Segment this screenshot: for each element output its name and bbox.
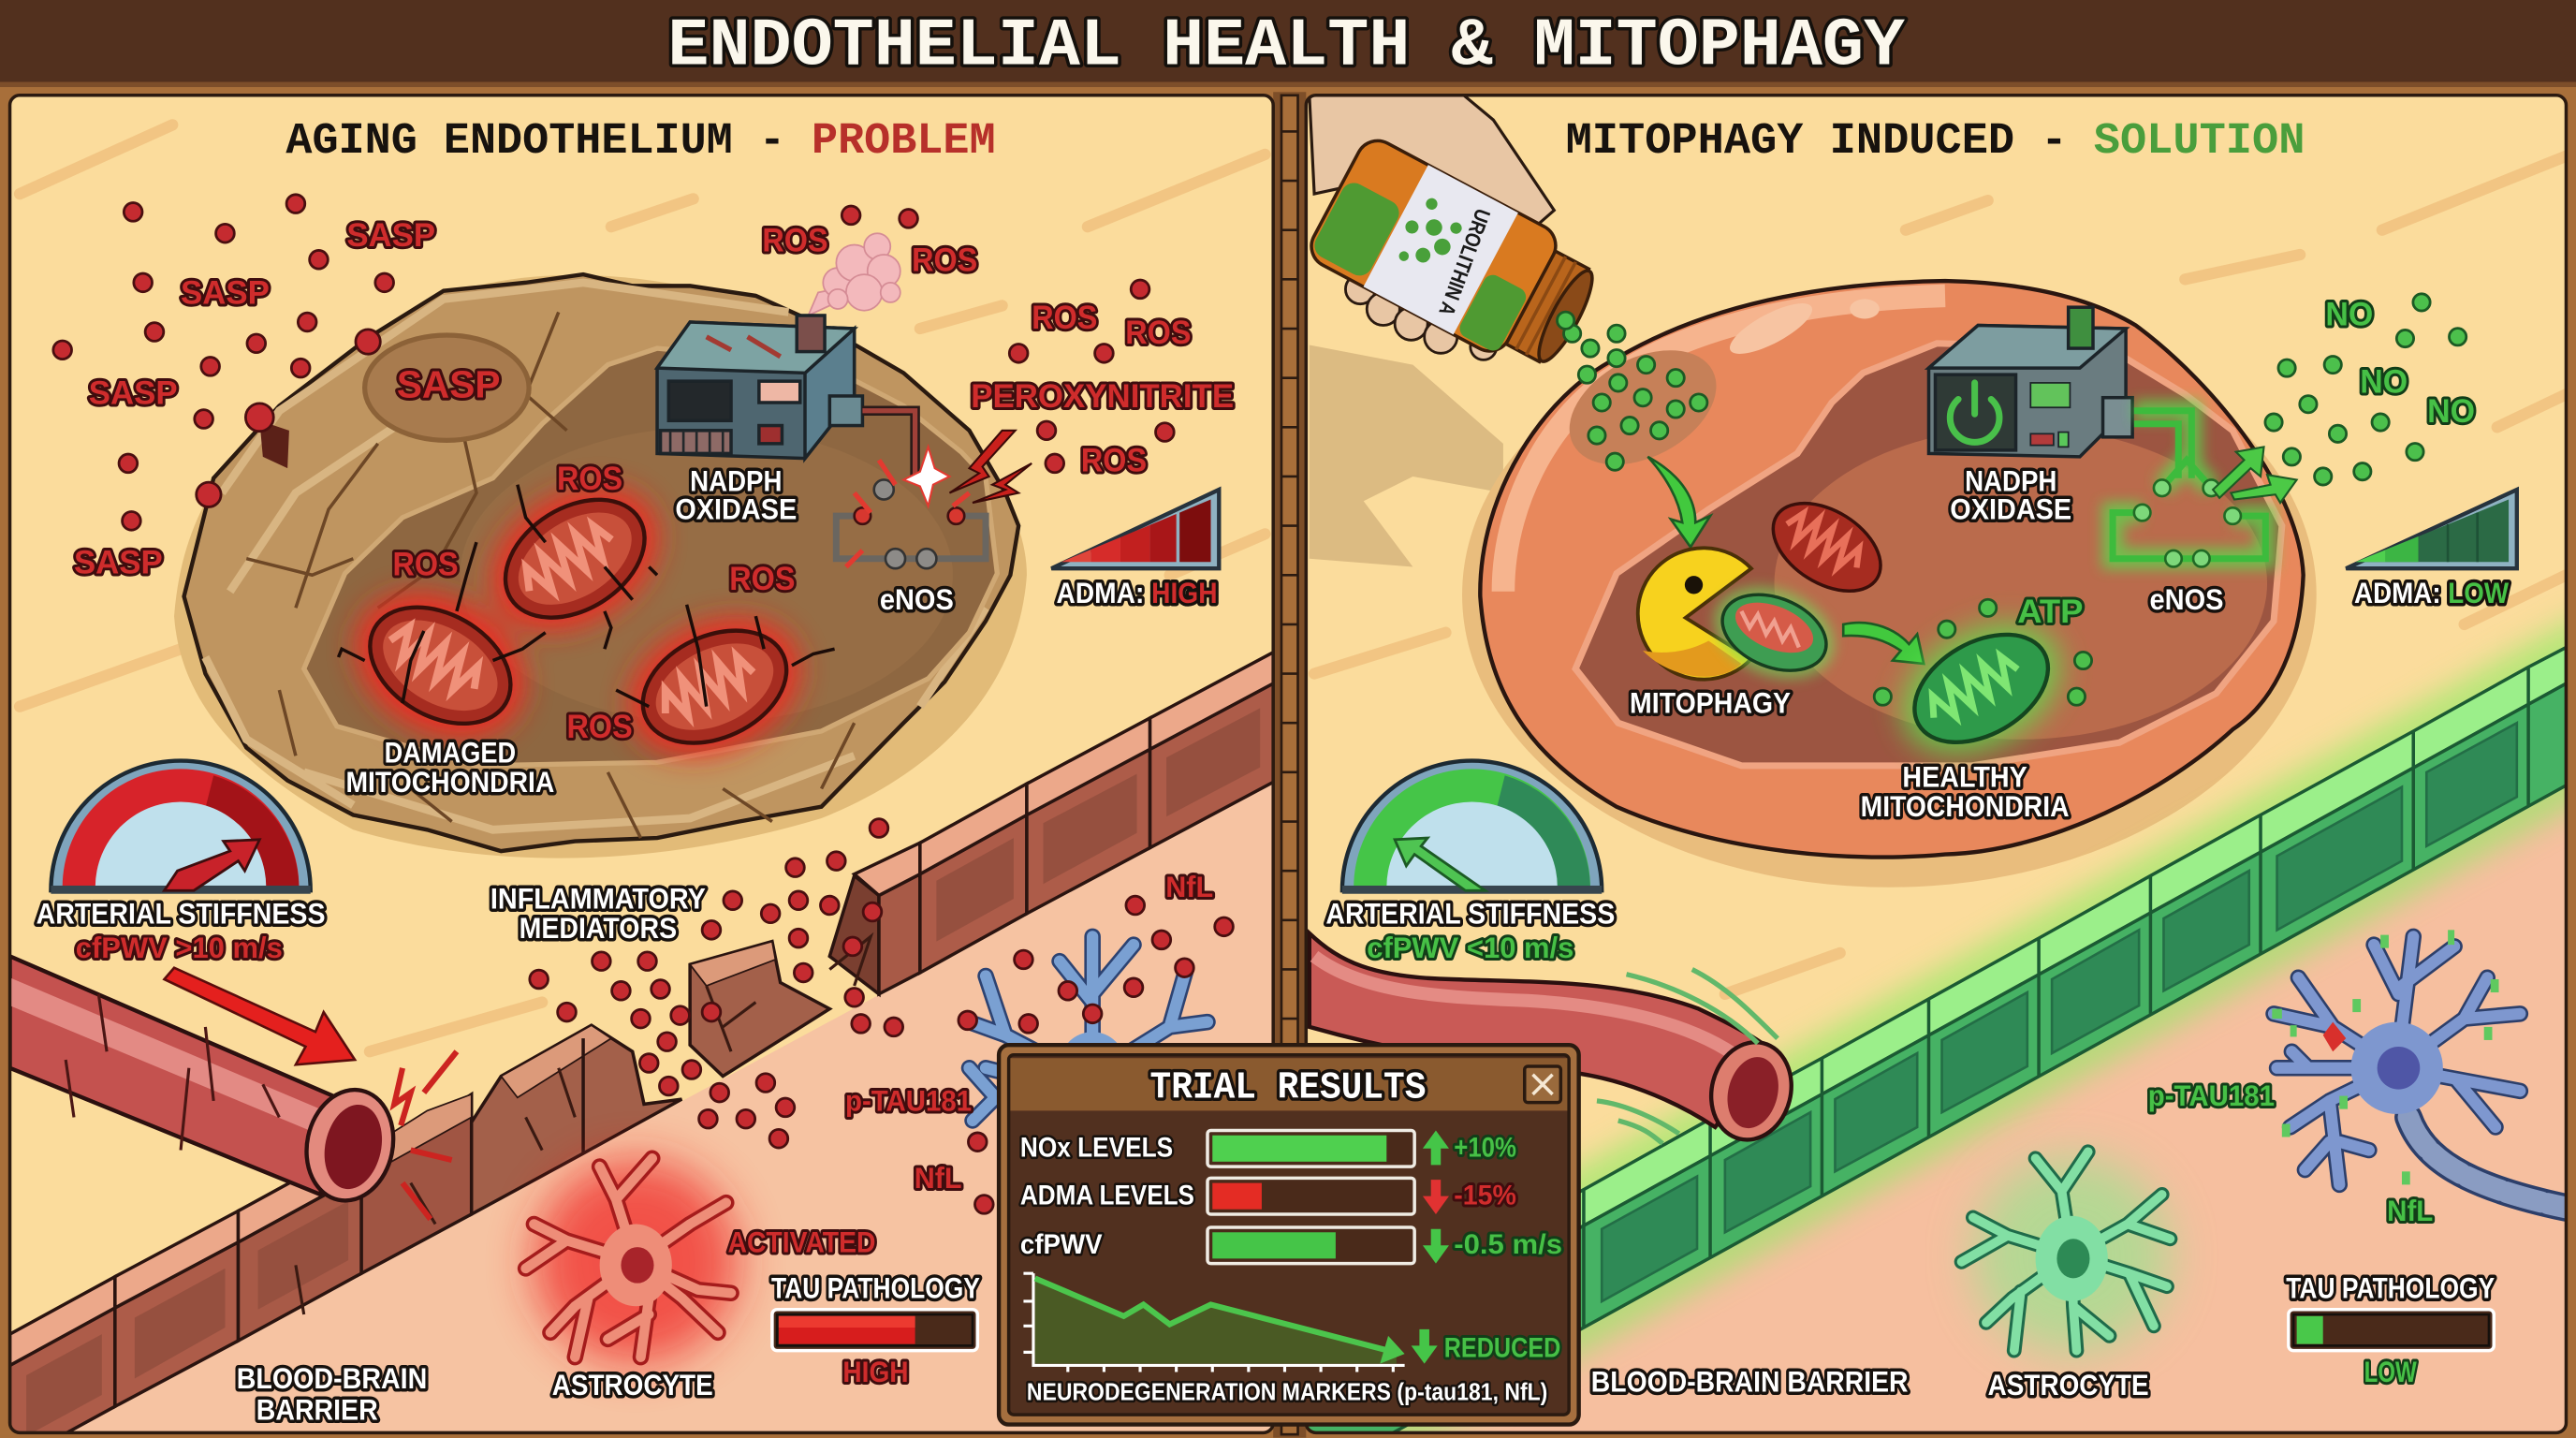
bar fill (1212, 1183, 1262, 1210)
damaged mitochondrion 3 (616, 604, 835, 745)
vessel opening (297, 1081, 403, 1209)
icon: NADPH oxidase off machine (1928, 307, 2132, 457)
bar (1208, 1227, 1414, 1264)
label eNOS: eNOS (2150, 582, 2224, 616)
arrows to NO (2213, 447, 2297, 503)
bottle (1304, 133, 1609, 383)
reduced indicator (1412, 1329, 1560, 1364)
cell body (1480, 281, 2304, 858)
label tau pathology: TAU PATHOLOGY (2286, 1270, 2495, 1304)
brain tissue area (1298, 785, 2566, 1438)
label arterial stiffness: ARTERIAL STIFFNESS (37, 896, 326, 930)
gauge needle (1395, 838, 1486, 890)
damaged endothelial cell (184, 274, 1018, 851)
icon: hand and urolithin bottle (1304, 95, 1609, 383)
label SASP 2: SASP (181, 275, 270, 312)
label p-tau181: p-TAU181 (2148, 1078, 2275, 1112)
chart line (1035, 1278, 1388, 1351)
title bar (0, 0, 2576, 87)
label tau high: HIGH (842, 1355, 909, 1388)
panel title: TRIAL RESULTS (1150, 1066, 1426, 1109)
label oxidase: OXIDASE (1950, 492, 2071, 526)
icon: arterial stiffness gauge high (51, 761, 311, 894)
label ATP: ATP (2017, 594, 2083, 630)
neuron green specks (2272, 930, 2499, 1184)
red mitochondrion awaiting removal (1758, 485, 1896, 609)
eNOS active circuit (2113, 411, 2265, 566)
label NO 3: NO (2427, 393, 2475, 430)
icon: eNOS broken circuit (836, 479, 986, 568)
bottle label text: UROLITHIN A (1434, 206, 1496, 319)
title: ENDOTHELIAL HEALTH & MITOPHAGY (667, 7, 1906, 84)
label mitochondria: MITOCHONDRIA (1861, 789, 2070, 823)
label tau low: LOW (2364, 1355, 2417, 1388)
icon: arterial stiffness gauge low (1342, 761, 1602, 894)
row: ADMA levels (1020, 1178, 1516, 1214)
hand (1310, 95, 1554, 233)
background streaks (1314, 156, 2566, 994)
floor inner tone (460, 427, 953, 723)
eNOS circuit glow (2113, 411, 2265, 559)
heading: mitophagy induced solution: MITOPHAGY INDUCED - SOLUTION (1566, 117, 2305, 167)
label ROS 8: ROS (729, 561, 795, 597)
line chart: neurodegeneration markers (1023, 1273, 1405, 1372)
row label: ADMA LEVELS (1020, 1180, 1194, 1211)
panel background sand (1306, 95, 2566, 1432)
label activated: ACTIVATED (728, 1225, 875, 1258)
label ROS 5: ROS (1081, 443, 1147, 479)
label oxidase: OXIDASE (675, 492, 797, 526)
label tau pathology: TAU PATHOLOGY (771, 1270, 980, 1304)
brain tissue area (67, 782, 1273, 1432)
rock outer shell (184, 274, 1018, 851)
green arrow to pacman (1647, 457, 1710, 547)
eaten mitochondrion (1701, 569, 1848, 696)
label NADPH: NADPH (690, 464, 782, 498)
vessel opening (1701, 1034, 1802, 1149)
wall brick inset panels left (26, 1201, 348, 1436)
label NfL: NfL (2387, 1194, 2433, 1227)
label arterial stiffness: ARTERIAL STIFFNESS (1325, 896, 1615, 930)
down arrow (1412, 1329, 1438, 1364)
tau pathology low bar (2289, 1310, 2494, 1351)
icon: ADMA high meter (1051, 490, 1219, 568)
row label: NOx LEVELS (1020, 1133, 1173, 1164)
icon: pacman mitophagy (1638, 548, 1751, 680)
floor lighter centre (1775, 427, 2267, 740)
panel header (1010, 1058, 1567, 1110)
panel frame (999, 1045, 1579, 1425)
icon: sparks and lightning (846, 431, 1032, 566)
icon: NADPH oxidase machine (657, 315, 862, 459)
wall bricks right (829, 653, 1273, 994)
wall top surface (1298, 647, 2566, 1384)
background streaks (14, 119, 1271, 1058)
label mitophagy: MITOPHAGY (1630, 686, 1791, 720)
close button (1525, 1066, 1560, 1103)
heading: aging endothelium problem: AGING ENDOTHELIUM - PROBLEM (285, 117, 996, 167)
rock highlights (205, 283, 986, 829)
label mitochondria: MITOCHONDRIA (345, 765, 554, 799)
crumbled wall piece A (472, 1025, 681, 1214)
crumbled wall piece B (690, 942, 829, 1077)
green urolithin particles (1557, 312, 1707, 470)
label NfL 2: NfL (915, 1161, 962, 1195)
label ROS 9: ROS (567, 709, 633, 745)
wall brick panels (1602, 723, 2517, 1301)
label ROS 4: ROS (1125, 315, 1191, 351)
red particles SASP (53, 195, 394, 530)
pipes to eNOS (862, 411, 915, 478)
down arrow (1423, 1229, 1449, 1264)
label cfPWV low: cfPWV <10 m/s (1367, 931, 1573, 964)
cracks (246, 312, 855, 838)
healthy mitochondrion (1895, 612, 2067, 765)
cell lip highlight (1503, 296, 1945, 592)
row: NOx levels (1020, 1130, 1516, 1167)
astrocyte activated (526, 1158, 731, 1357)
label ROS 2: ROS (912, 242, 977, 279)
SASP crater (365, 335, 529, 440)
neuron damaged (970, 936, 1208, 1121)
wall bricks left (10, 1094, 472, 1438)
healthy mitochondrion glow (1879, 596, 2084, 781)
healthy endothelial cell (1480, 281, 2304, 858)
wall face (1298, 683, 2566, 1438)
chart arrowhead (1380, 1336, 1405, 1364)
cell shadow (174, 275, 1027, 858)
label ROS 3: ROS (1032, 300, 1097, 336)
gauge needle (165, 840, 259, 890)
bottle shadow (1310, 345, 1503, 566)
panel: aging endothelium problem (10, 95, 1273, 1438)
barrier leak sparks (394, 1051, 457, 1219)
damaged mitochondrion 2 (504, 484, 659, 650)
label SASP 1: SASP (346, 217, 435, 254)
bar (1208, 1130, 1414, 1167)
icon: smoke (809, 233, 900, 315)
value: -15% (1454, 1180, 1516, 1211)
label peroxynitrite: PEROXYNITRITE (971, 378, 1234, 415)
green NO particles (2265, 294, 2466, 485)
right panel labels (1325, 117, 2509, 1401)
label NfL 1: NfL (1165, 870, 1213, 903)
astrocyte healthy (1962, 1152, 2170, 1351)
label p-tau181: p-TAU181 (845, 1083, 972, 1117)
left panel labels (37, 117, 1234, 1426)
up arrow (1423, 1130, 1449, 1165)
ATP particles (1874, 599, 2092, 705)
cell shadow (1462, 302, 2317, 888)
label healthy: HEALTHY (1902, 760, 2027, 794)
panel body (1009, 1055, 1569, 1415)
blood-brain barrier broken wall (10, 653, 1273, 1438)
mitochondria damaged glow (330, 459, 822, 781)
green arrow to healthy mitochondrion (1843, 623, 1924, 664)
cell floor (304, 348, 997, 766)
label barrier: BARRIER (256, 1392, 378, 1426)
chart axes (1023, 1273, 1405, 1372)
label astrocyte: ASTROCYTE (1988, 1368, 2149, 1401)
label ADMA high: ADMA: HIGH (1057, 576, 1218, 609)
label mediators: MEDIATORS (520, 911, 677, 945)
gloss highlights (1723, 294, 1819, 363)
wound on rock (260, 425, 289, 468)
neuron healthy (2274, 936, 2566, 1208)
urolithin uptake patch (1550, 327, 1735, 488)
red flow arrow (165, 968, 355, 1064)
label ROS 1: ROS (762, 223, 828, 259)
centre divider (1273, 92, 1306, 1438)
damaged mitochondrion 1 (339, 542, 546, 747)
label SASP 4: SASP (74, 545, 163, 581)
motion lines (1597, 969, 1778, 1143)
panel: mitophagy induced solution (1298, 95, 2566, 1438)
value: +10% (1454, 1133, 1516, 1164)
bar fill (1212, 1136, 1386, 1162)
wall brick joints (1584, 668, 2528, 1328)
label ROS 6: ROS (557, 461, 622, 497)
row label: cfPWV (1020, 1229, 1103, 1260)
wall brick inset panels right (936, 708, 1260, 942)
down arrow (1423, 1180, 1449, 1214)
wall glow (1298, 647, 2566, 1438)
bar fill (1212, 1232, 1336, 1258)
icon: ADMA low meter (2346, 490, 2517, 568)
bar (1208, 1178, 1414, 1214)
label NO 1: NO (2325, 296, 2373, 332)
label NO 2: NO (2360, 363, 2408, 400)
fingers (1345, 274, 1497, 360)
chart caption: NEURODEGENERATION MARKERS (p-tau181, NfL) (1027, 1377, 1547, 1405)
value: -0.5 m/s (1454, 1229, 1562, 1260)
blood vessel stiff (10, 956, 337, 1195)
cell floor (1575, 344, 2282, 766)
panel background sand (10, 95, 1273, 1432)
astrocyte calm glow (1973, 1157, 2170, 1354)
pipes inner (862, 411, 915, 478)
label cfPWV high: cfPWV >10 m/s (76, 931, 283, 964)
tau pathology high bar (772, 1310, 977, 1351)
chart area fill (1035, 1278, 1397, 1364)
red particles ROS (842, 206, 1174, 473)
label ROS 7: ROS (392, 546, 459, 582)
blood vessel healthy (1310, 933, 1773, 1127)
label eNOS: eNOS (880, 582, 954, 616)
label blood-brain barrier: BLOOD-BRAIN BARRIER (1591, 1365, 1909, 1399)
astrocyte activated glow (534, 1160, 738, 1364)
label SASP crater: SASP (397, 363, 500, 406)
label blood-brain: BLOOD-BRAIN (237, 1361, 427, 1395)
label SASP 3: SASP (89, 375, 178, 412)
label damaged: DAMAGED (385, 735, 516, 769)
panel: trial results (999, 1045, 1579, 1425)
label inflammatory: INFLAMMATORY (490, 882, 706, 916)
red particles inflammatory mediators (530, 819, 1233, 1213)
label NADPH: NADPH (1965, 464, 2056, 498)
label ADMA low: ADMA: LOW (2354, 576, 2509, 609)
rubble cracks (296, 936, 871, 1314)
row: cfPWV (1020, 1227, 1562, 1264)
label astrocyte: ASTROCYTE (552, 1368, 713, 1401)
blood-brain barrier healthy wall (1298, 647, 2566, 1438)
reduced text: REDUCED (1444, 1333, 1560, 1364)
